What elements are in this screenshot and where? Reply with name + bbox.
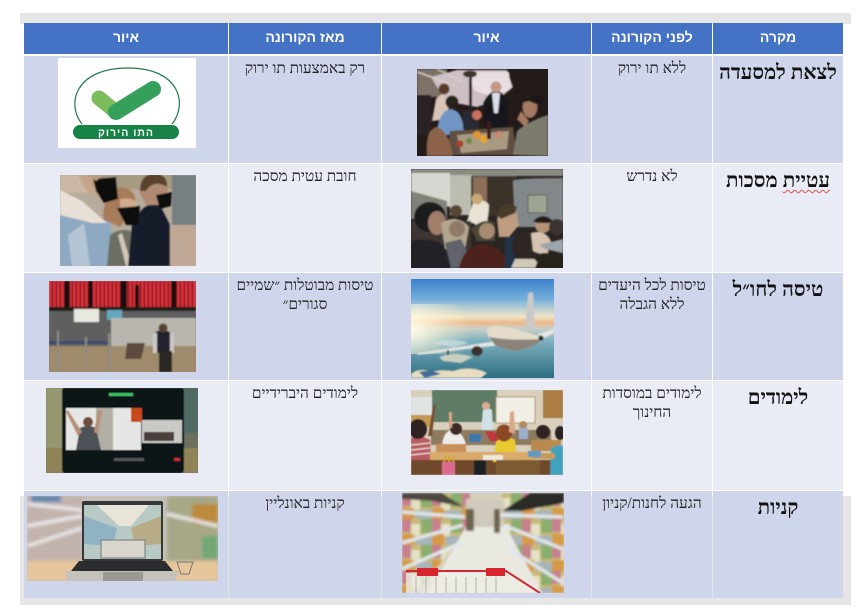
row 1 after image cell: [24, 56, 228, 163]
header: since corona: מאז הקורונה: [265, 29, 345, 45]
row 4 before image cell: [382, 381, 591, 490]
row 5 after image cell: [24, 491, 228, 598]
gray backdrop: top strip: [20, 13, 851, 24]
row 2 before text: לא נדרש: [626, 168, 678, 185]
row 1 before text: [592, 56, 712, 163]
row 3 since text: סגורים״: [283, 296, 327, 313]
row 1 before text: ללא תו ירוק: [618, 60, 686, 77]
row 2 since text: [229, 164, 381, 272]
row 3 case: flight abroad: [713, 273, 843, 380]
header: illustration after: איור: [113, 29, 139, 45]
row 5 since text: [229, 491, 381, 598]
header: before corona: [592, 23, 712, 54]
row 2 case: wearing masks: עטיית מסכות: [726, 170, 830, 192]
row 2 after image cell: [24, 164, 228, 272]
row 3 after image cell: [24, 273, 228, 380]
row 3 before text: [592, 273, 712, 380]
row 4 since text: [229, 381, 381, 490]
row 3 before text: טיסות לכל היעדים: [598, 277, 706, 294]
row 5 since text: קניות באונליין: [265, 495, 345, 512]
row 4 before text: לימודים במוסדות: [602, 385, 702, 402]
icon: green pass logo: התו הירוק: [98, 127, 154, 139]
row 5 before image cell: [382, 491, 591, 598]
row 3 case: flight abroad: טיסה לחו״ל: [733, 279, 823, 301]
row 2 case: wearing masks: [713, 164, 843, 272]
row 1 case: going to a restaurant: [713, 56, 843, 163]
icon: green pass logo: [58, 58, 196, 148]
photo: hybrid lesson on a laptop: [46, 388, 198, 473]
photo: three people wearing masks: [60, 175, 196, 266]
header: before corona: לפני הקורונה: [611, 29, 693, 45]
photo: airplane above the clouds: [411, 279, 554, 378]
row 3 before image cell: [382, 273, 591, 380]
row 2 before image cell: [382, 164, 591, 272]
row 3 since text: טיסות מבוטלות ״שמיים: [237, 277, 373, 294]
row 4 after image cell: [24, 381, 228, 490]
photo: online shopping on a laptop: [27, 496, 218, 581]
row 1 since text: [229, 56, 381, 163]
row 4 before text: [592, 381, 712, 490]
photo: crowded restaurant table: [417, 69, 548, 156]
row 3 since text: [229, 273, 381, 380]
photo: pupils raising hands in classroom: [411, 390, 563, 475]
row 1 before image cell: [382, 56, 591, 163]
gray backdrop: bottom block: [20, 496, 851, 605]
row 5 case: shopping: קניות: [758, 497, 798, 519]
header: since corona: [229, 23, 381, 54]
row 5 before text: הגעה לחנות/קניון: [602, 495, 702, 512]
row 4 case: studies: לימודים: [748, 387, 808, 409]
row 2 since text: חובת עטית מסכה: [253, 168, 357, 185]
header: illustration before: איור: [473, 29, 500, 45]
header: case: מקרה: [760, 29, 796, 45]
header: illustration before: [382, 23, 591, 54]
row 1 since text: רק באמצעות תו ירוק: [245, 60, 365, 77]
photo: empty airport departures hall: [49, 281, 196, 372]
row 3 before text: ללא הגבלה: [620, 296, 684, 313]
header: case: [713, 23, 843, 54]
photo: crowded airplane aisle: [411, 169, 563, 268]
row 4 since text: לימודים היברידיים: [252, 385, 358, 402]
row 4 case: studies: [713, 381, 843, 490]
header: illustration after: [24, 23, 228, 54]
row 2 before text: [592, 164, 712, 272]
row 1 case: going to a restaurant: לצאת למסעדה: [719, 62, 837, 84]
photo: supermarket aisle with cart: [402, 493, 564, 593]
row 5 before text: [592, 491, 712, 598]
row 5 case: shopping: [713, 491, 843, 598]
row 4 before text: החינוך: [633, 404, 671, 421]
